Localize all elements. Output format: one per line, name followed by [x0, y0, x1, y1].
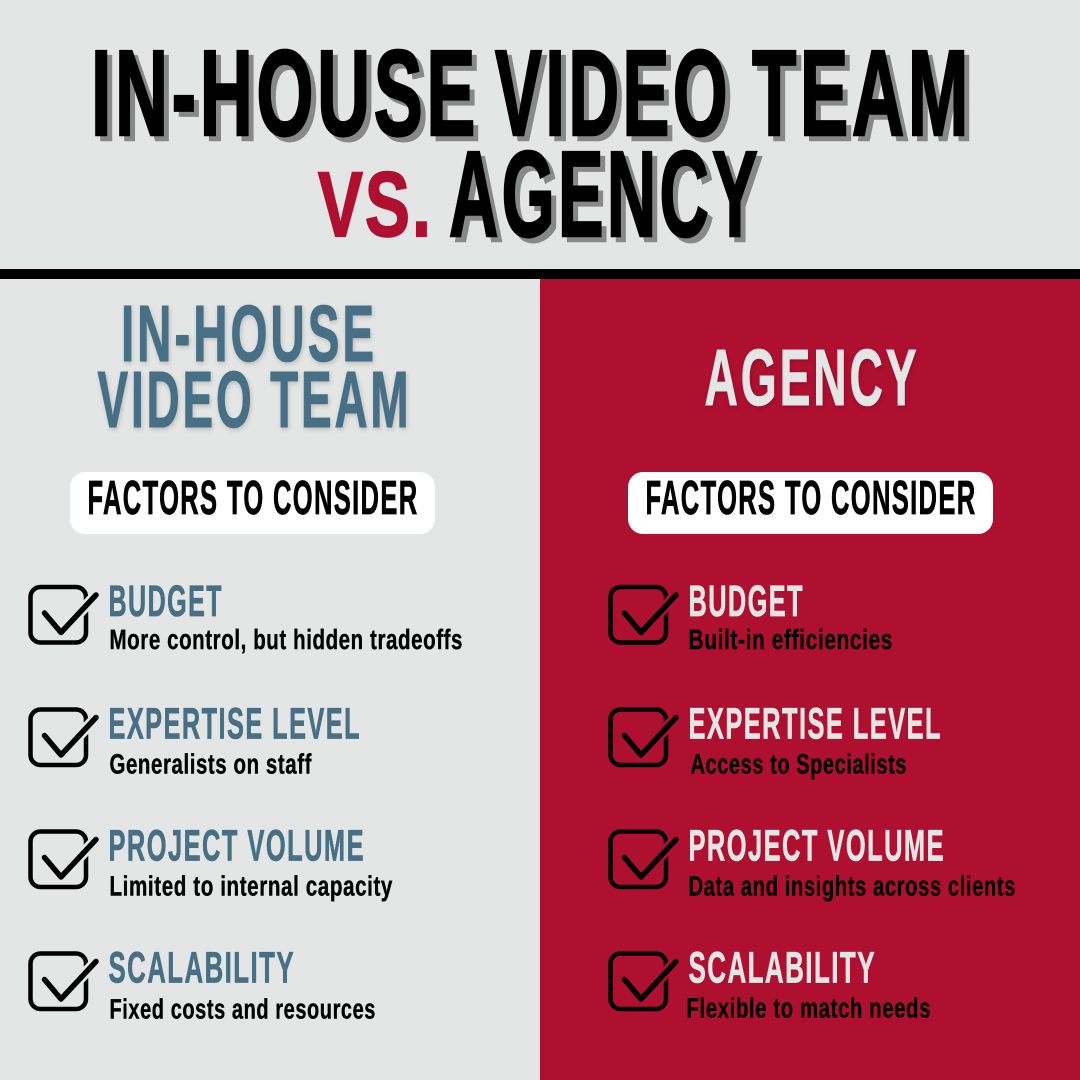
item: scalability	[610, 944, 931, 1024]
item: budget: BUDGET	[108, 577, 223, 626]
title	[91, 25, 972, 262]
item: expertise level	[610, 700, 942, 780]
item: expertise level: EXPERTISE LEVEL	[108, 700, 361, 748]
heading: in-house video team	[98, 289, 412, 444]
item: scalability	[30, 944, 376, 1024]
item: project volume	[30, 822, 393, 902]
item: budget: More control, but hidden tradeoffs	[110, 624, 463, 655]
panel: in-house	[30, 289, 463, 1024]
pill: factors to consider: FACTORS TO CONSIDER	[88, 472, 418, 525]
item: scalability: SCALABILITY	[688, 944, 876, 992]
item: scalability: Fixed costs and resources	[110, 994, 376, 1024]
item: project volume: Limited to internal capacity	[110, 870, 393, 902]
title: IN-HOUSE	[91, 25, 479, 161]
item: budget: BUDGET	[688, 577, 804, 626]
title word: vs.: VS.	[318, 154, 433, 256]
panel: agency background	[540, 279, 1080, 1080]
item: expertise level: Generalists on staff	[110, 748, 312, 780]
divider bar	[0, 269, 1080, 279]
heading: in-house video team: VIDEO TEAM	[98, 355, 412, 444]
item: scalability: SCALABILITY	[108, 944, 295, 992]
pill: factors to consider	[70, 472, 435, 534]
item: expertise level: Access to Specialists	[690, 748, 907, 780]
item: project volume	[610, 822, 1016, 902]
item: project volume: PROJECT VOLUME	[108, 822, 365, 870]
title: VIDEO	[495, 25, 731, 161]
title: AGENCY	[449, 126, 761, 262]
heading: agency: AGENCY	[704, 333, 920, 422]
pill: factors to consider	[628, 472, 993, 534]
panel: agency	[610, 333, 1016, 1024]
item: budget	[30, 577, 463, 655]
item: expertise level	[30, 700, 361, 780]
item: budget	[610, 577, 893, 655]
item: budget: Built-in efficiencies	[688, 624, 893, 655]
heading: in-house video team: IN-HOUSE	[121, 289, 377, 378]
item: scalability: Flexible to match needs	[686, 992, 931, 1024]
